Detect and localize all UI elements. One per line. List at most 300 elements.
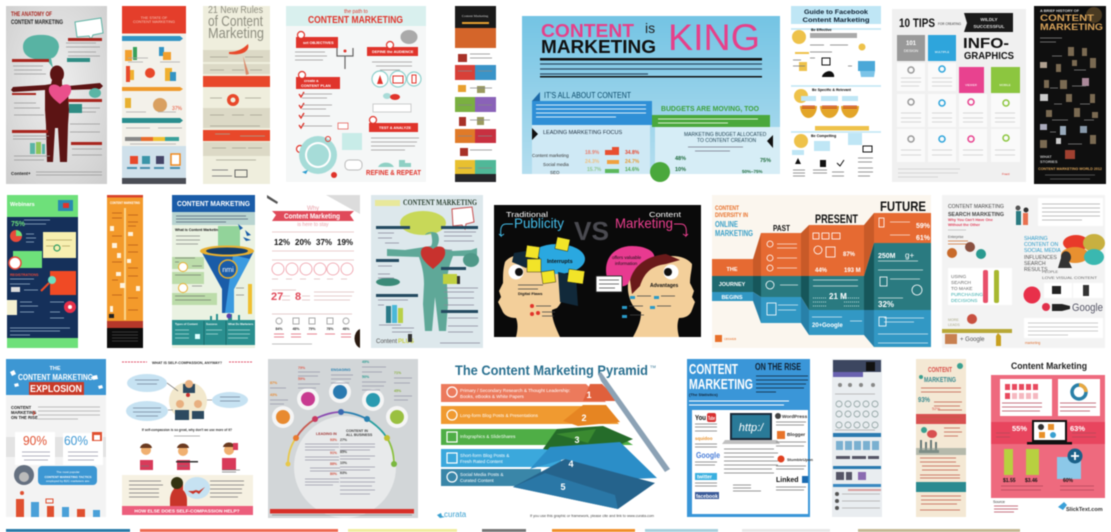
- bar labels: Books, eBooks & White Papers: [460, 394, 525, 399]
- title: [308, 9, 403, 26]
- grey callout: [596, 276, 622, 292]
- search panel: [948, 268, 1012, 305]
- thumbnail: content marketing is king: SEO: [550, 170, 560, 175]
- thumbnail: content diversity in online marketing: CBSWEB: [724, 337, 736, 341]
- question heading: What is Content Marketing?: [175, 228, 223, 232]
- channel ring: [299, 136, 337, 174]
- coffee cup: [354, 329, 360, 348]
- thumbnail: 10 tips for wildly successful infographics: VIEWER: [965, 83, 978, 87]
- top text blocks: 59%: [298, 377, 306, 381]
- bar labels: Long-form Blog Posts & Presentations: [460, 413, 539, 418]
- right logos: StumbleUpon: [787, 457, 814, 462]
- title: WHAT IS SELF-COMPASSION, ANYWAY?: [152, 361, 222, 365]
- thumbnail: content marketing is king: 24.7%: [625, 159, 640, 165]
- stats panel: [122, 146, 186, 178]
- values: 60%: [1063, 478, 1074, 484]
- pinterest to google: [1042, 303, 1050, 311]
- thumbnail: traditional publicity vs content marketing: offers valuable: [612, 255, 642, 260]
- thumbnail: content marketing on the rise: ON THE RISE: [755, 362, 801, 373]
- grey bubble: [400, 30, 418, 44]
- body figure: [11, 66, 103, 162]
- white note panel: [7, 300, 17, 315]
- check lists: [299, 92, 304, 128]
- values: $3.46: [1025, 478, 1038, 484]
- thumbnail: grey arc infographic: 80%: [330, 472, 338, 476]
- top text blocks: 49%: [362, 360, 370, 364]
- layer numbers: 1: [586, 390, 592, 400]
- grey arrow strip: [598, 372, 670, 472]
- thumbnail: content marketing is king: 14.6%: [625, 167, 640, 173]
- thumbnail: content marketing is king: [522, 16, 780, 182]
- logo: Content+: [11, 171, 31, 176]
- numbers: 21 M: [829, 292, 847, 301]
- thumbnail: 10 tips for wildly successful infographics: 101: [906, 41, 917, 47]
- future column: [874, 213, 931, 243]
- top text blocks: 45%: [394, 389, 402, 393]
- large red stats: 8: [295, 291, 301, 303]
- title: [1086, 7, 1102, 23]
- thumbnail: content diversity in online marketing: g+: [905, 251, 914, 260]
- thumbnail: content marketing is king: MARKETING BUDGET ALLOCATED: [684, 132, 767, 138]
- bar labels: [460, 388, 570, 483]
- thumbnail: content marketing and search marketing: USING: [951, 274, 966, 280]
- thumbnail: content marketing funnel: Success: [206, 322, 218, 326]
- thumbnail: grey arc infographic: 10%: [340, 461, 348, 465]
- sharing heading: CONTENT ON: [1024, 242, 1058, 248]
- dark pink band: [991, 422, 1105, 444]
- title: [208, 5, 264, 42]
- timeline small images: [109, 226, 140, 318]
- title: THE STATE OF: [141, 16, 168, 20]
- logo: [715, 335, 722, 342]
- thumbnail: content marketing is king: 18.9%: [585, 150, 600, 156]
- yellow panel: [43, 232, 76, 258]
- thumbnail: content marketing and search marketing: INFLUENCES: [1024, 255, 1057, 261]
- title: [133, 16, 175, 24]
- paper and birds: [218, 226, 240, 250]
- table: [835, 492, 839, 510]
- title: the path to: [344, 9, 368, 15]
- thumbnail: the content marketing explosion: CONTENT MARKETING TACTICS: [44, 475, 92, 479]
- bar labels: Primary / Secondary Research & Thought Leadership:: [460, 388, 570, 393]
- percentages: 12%: [274, 238, 290, 247]
- visual content: LOVE VISUAL CONTENT: [1042, 275, 1098, 280]
- right logos: Blogger: [787, 432, 805, 438]
- thumbnail: content marketing is king: 34.8%: [625, 150, 640, 156]
- thumbnail: content marketing is king: LEADING MARKETING FOCUS: [543, 130, 622, 136]
- title: [948, 204, 1004, 218]
- right logos: Linked: [776, 477, 799, 484]
- logos: squidoo: [695, 436, 713, 441]
- body figure: [387, 232, 477, 331]
- orange semicircles: [800, 106, 859, 118]
- heading right: Content: [649, 210, 682, 219]
- thumbnail: content marketing is king: Social media: [543, 162, 569, 167]
- third section cards: [792, 133, 862, 155]
- thumbnail: the content marketing pyramid: [436, 359, 676, 519]
- left heading: CONTENT: [715, 205, 739, 212]
- thumbnail: content marketing funnel: Types of Content: [175, 322, 198, 326]
- visual content: PEOPLE: [1042, 269, 1058, 274]
- top text blocks: 43%: [270, 393, 278, 397]
- visual content: [1042, 269, 1098, 280]
- blue clouds: [126, 374, 248, 421]
- journey column: [712, 259, 753, 276]
- thumbnail: content marketing is king: 50%–75%: [742, 169, 763, 174]
- center columns: ALL BUSINESS: [346, 433, 373, 437]
- title: CONTENT MARKETING: [18, 373, 93, 382]
- title: [11, 11, 63, 26]
- numbers: 61%: [916, 235, 931, 242]
- thumbnail: content marketing and search marketing: + Google: [960, 337, 985, 343]
- dotted grid: [813, 298, 860, 306]
- title: CONTENT MARKETING: [403, 197, 477, 207]
- connectors: [167, 383, 212, 410]
- layer numbers: 5: [560, 482, 566, 492]
- center columns: CONTENT IN: [346, 429, 368, 433]
- thumbnail: content marketing on the rise: (The Statistics): [689, 392, 718, 397]
- green bands: [172, 257, 217, 305]
- thumbnail: content diversity in online marketing: Google: [822, 323, 843, 329]
- goal post: [337, 48, 353, 69]
- green panel with clock: [13, 251, 42, 268]
- values: $1.55: [1003, 478, 1016, 484]
- speech bubble: [452, 207, 474, 229]
- pink band: [122, 506, 253, 515]
- heart: [421, 247, 445, 269]
- thumbnail: the content marketing pyramid: TM: [650, 364, 656, 369]
- thumbnail: content marketing on the rise: facebook: [696, 494, 718, 500]
- thumbnail: grey arc infographic: 27%: [340, 438, 348, 442]
- thumbnail: why content marketing is here to stay: 78%: [326, 327, 334, 331]
- thumbnail: the state of content marketing: 37%: [172, 106, 183, 112]
- thumbnail: why content marketing is here to stay: is here to stay: [297, 222, 329, 228]
- values: [1003, 478, 1074, 484]
- footer bands: [107, 321, 143, 328]
- top text blocks: 50%: [362, 375, 370, 379]
- tip category blocks: [897, 35, 925, 61]
- thumbnail: the state of content marketing: [122, 6, 186, 184]
- speech and hands: [921, 427, 927, 433]
- paper decorations: [10, 370, 103, 389]
- speech bubble: [75, 18, 103, 39]
- circle photo and pill: [38, 466, 97, 485]
- right logos: [776, 414, 814, 484]
- large red stats: 27: [271, 291, 283, 303]
- thumbnail: content marketing is king: TO CONTENT CREATION: [697, 138, 757, 144]
- thumbnail: the anatomy of content marketing: [6, 6, 107, 184]
- thumbnail: content marketing funnel: [172, 195, 255, 348]
- title: MARKETING: [541, 37, 656, 57]
- thumbnail: why content marketing is here to stay: Content Marketing: [284, 214, 340, 220]
- intro text: [540, 58, 762, 60]
- money bag: [89, 88, 101, 98]
- thumbnail: guide to facebook content marketing: Be Specific & Relevant: [812, 88, 852, 92]
- thumbnail: grey arc infographic: 88%: [330, 462, 338, 466]
- thumbnail: the content marketing explosion: [6, 359, 106, 517]
- thumbnail: content marketing and search marketing: SEARCH: [1024, 261, 1046, 267]
- thumbnail: the content marketing explosion: EXPLOSION: [30, 384, 82, 395]
- logos: Google: [696, 451, 720, 460]
- step number circles: [296, 32, 394, 152]
- teal note: [342, 133, 362, 150]
- thumbnail: why content marketing is here to stay: [266, 195, 360, 348]
- thumbnail: content marketing and search marketing: RESULTS: [1024, 267, 1048, 273]
- title: CONTENT MARKETING: [948, 204, 1004, 210]
- title: [541, 21, 656, 57]
- icons: [766, 218, 922, 326]
- title: [924, 367, 956, 384]
- brain: [400, 211, 446, 235]
- charts: [125, 50, 132, 61]
- red chili graphic: [229, 44, 248, 54]
- thumbnail: why content marketing is here to stay: 48%: [342, 327, 350, 331]
- thumbnail: 10 tips for wildly successful infographics: MOBILE: [999, 83, 1011, 87]
- top text blocks: 87%: [270, 381, 278, 385]
- center columns: [316, 429, 373, 437]
- thumbnail: content marketing and search marketing: TO MAKE: [951, 286, 973, 292]
- band stats: 55%: [1012, 424, 1027, 433]
- right brain: [606, 246, 654, 287]
- section: it's all about content: IT'S ALL ABOUT CONTENT: [544, 91, 631, 100]
- sharing heading: [1024, 236, 1061, 254]
- thumbnail: traditional publicity vs content marketing: information: [615, 261, 638, 266]
- section: budgets are moving: BUDGETS ARE MOVING, TOO: [661, 104, 759, 113]
- audience icons: [372, 71, 421, 87]
- title: [802, 9, 870, 24]
- thumbnail: content marketing on the rise: [687, 359, 814, 517]
- tan bands: [203, 50, 270, 156]
- right head: [628, 256, 695, 337]
- thumbnail: webinars navy: [7, 195, 78, 348]
- thumbnail: 10 tips for wildly successful infographics: SUCCESSFUL: [973, 24, 1005, 29]
- refine and repeat: REFINE & REPEAT: [366, 170, 422, 177]
- tip icons: [908, 66, 1009, 142]
- right eye: [664, 264, 678, 280]
- thumbnail: 10 tips for wildly successful infographics: DESIGN: [904, 49, 919, 53]
- funnel: [201, 251, 254, 313]
- right logos: WordPress: [782, 414, 808, 420]
- thumb icons: [1005, 384, 1038, 399]
- bottom icons and values: [276, 318, 349, 324]
- thumbnail: orange timeline: [107, 195, 143, 348]
- question: If self-compassion is so great, why don't we use more of it?: [142, 428, 232, 432]
- thumbnail: 10 tips for wildly successful infographics: GRAPHICS: [964, 51, 1014, 62]
- thumbnail: content marketing on the rise: http:/: [739, 422, 764, 434]
- dark woman: [170, 479, 187, 506]
- heading text: REGISTRATIONS: [10, 273, 39, 277]
- rainbow arc: [288, 412, 394, 464]
- keyboard and pen: [326, 195, 360, 214]
- people row: [443, 274, 457, 284]
- connectors: [753, 233, 761, 276]
- small drinks icons: [458, 54, 468, 156]
- brain: [23, 35, 59, 68]
- left heading: DIVERSITY IN: [715, 212, 748, 219]
- money bag: [463, 253, 479, 267]
- numbers: 32%: [878, 300, 894, 309]
- red bands: [203, 76, 270, 87]
- logos: [695, 413, 720, 460]
- thumbnail: dark columnar infographic: [455, 6, 496, 182]
- left heading: ONLINE: [715, 220, 738, 229]
- heading left: Traditional: [506, 210, 548, 219]
- numbers: 250M: [878, 253, 896, 260]
- thumbnail: content marketing funnel: What Do Marketers: [228, 322, 254, 326]
- budget panel: [655, 127, 780, 174]
- thumbnail: content marketing and search marketing: SEARCH: [951, 280, 972, 286]
- percentages: 20%: [295, 238, 311, 247]
- tiny historical thumbnails: [1040, 47, 1098, 159]
- grey brain/eye: [376, 278, 400, 286]
- purple header band: [833, 372, 863, 377]
- people circle: [169, 382, 207, 420]
- thumbnail: the path to content marketing: set OBJECTIVES: [303, 41, 334, 45]
- thumbnail: 10 tips for wildly successful infographics: WILDLY: [980, 17, 998, 22]
- numbers: [815, 223, 931, 309]
- column headings: PAST: [773, 223, 791, 233]
- bar labels: Curated Content: [460, 478, 494, 483]
- bars: [441, 384, 606, 402]
- thumbnail: why content marketing is here to stay: 48%: [292, 327, 300, 331]
- thumbnail: grey arc infographic: 93%: [330, 438, 338, 442]
- title: 10 TIPS: [899, 16, 935, 30]
- top text blocks: 79%: [298, 366, 306, 370]
- percentages: 37%: [316, 238, 332, 247]
- thumbnail: grey arc infographic: [268, 359, 418, 518]
- band stats: 63%: [1070, 424, 1085, 433]
- small icons row: [838, 383, 875, 387]
- thumbnail: traditional publicity vs content marketing: Interrupts: [547, 259, 573, 265]
- thumbnail: the path to content marketing: CONTENT PLAN: [301, 84, 331, 88]
- thumbnail: content marketing and search marketing: DECISIONS: [951, 298, 977, 304]
- thumbnail: brief history of content marketing: CONTENT: [1040, 13, 1094, 24]
- thumbnail: brief history of content marketing: WHAT: [1040, 154, 1052, 159]
- title: CONTENT MARKETING: [308, 14, 403, 26]
- layer numbers: 4: [568, 459, 574, 469]
- thumbnail: content diversity in online marketing: [712, 195, 931, 348]
- footer note: If you use this graphic or framework, please cite and link to www.curata.com: [530, 514, 654, 518]
- logos: You: [695, 415, 706, 422]
- thumbnail: brief history of content marketing: CONTENT MARKETING WORLD 2012: [1038, 167, 1102, 171]
- column headings: [773, 198, 926, 233]
- left heading: [715, 205, 753, 238]
- pyramid layers: [583, 384, 619, 401]
- title: The Content Marketing Pyramid: [455, 362, 648, 378]
- thumbnail: brief history of content marketing: A BRIEF HISTORY OF: [1040, 9, 1080, 13]
- tile row: [836, 441, 879, 450]
- curata logo: curata: [444, 510, 467, 519]
- title: Why: [307, 206, 319, 212]
- thumbnail: content diversity in online marketing: 20+: [812, 323, 823, 329]
- left heading: MARKETING: [715, 229, 753, 238]
- thumbnail: the content marketing explosion: 60%: [64, 433, 88, 448]
- layer numbers: 3: [574, 435, 580, 445]
- on the rise heading: MARKETING: [11, 410, 36, 415]
- blue section bands: [833, 433, 881, 437]
- more leads: MORE: [948, 318, 959, 322]
- numbers: 87%: [843, 252, 856, 258]
- thumbnail: content marketing and search marketing: Google: [1072, 302, 1103, 314]
- small bar chart: [30, 143, 35, 154]
- red strip: [270, 509, 414, 514]
- logo: Content: [376, 339, 397, 345]
- thumbnail: dark columnar infographic: Content Marketing: [462, 14, 489, 18]
- title: Content Marketing: [1011, 361, 1087, 371]
- title: CONTENT MARKETING: [177, 201, 251, 208]
- thumbnail: content marketing funnel: nmi: [222, 267, 234, 274]
- white panel: [692, 410, 808, 514]
- thumbnail: the path to content marketing: DEFINE the AUDIENCE: [372, 50, 414, 54]
- title: of Content: [208, 13, 264, 30]
- title: MARKETING: [924, 377, 956, 384]
- teal footer: [172, 320, 255, 345]
- on the rise heading: [11, 405, 38, 420]
- thumbnail: content marketing is king: Content marketing: [532, 153, 569, 158]
- thumbnail: content marketing and search marketing: LEADS: [948, 323, 960, 327]
- footer: [122, 178, 186, 184]
- thumbnail: traditional publicity vs content marketing: Advantages: [650, 283, 679, 289]
- thumbnail: the path to content marketing: TEST & ANALYZE: [379, 126, 411, 130]
- pink body: [991, 375, 1105, 498]
- heart: [49, 84, 71, 104]
- thumbnail: content diversity in online marketing: BEGINS: [721, 295, 743, 301]
- section bars: [12, 38, 102, 145]
- large red stats: [271, 291, 301, 303]
- bar labels: Infographics & SlideShares: [460, 434, 516, 439]
- title: Marketing: [208, 25, 264, 42]
- device images: [866, 362, 875, 371]
- body copy: [13, 43, 102, 175]
- title: CONTENT MARKETING: [110, 201, 140, 205]
- left head: [498, 255, 565, 337]
- 60 percent card: [63, 433, 103, 465]
- top text blocks: [270, 360, 402, 397]
- step labels: [296, 37, 418, 132]
- left eye: [508, 264, 524, 280]
- numbers: 193 M: [844, 268, 861, 274]
- thumbnail: traditional publicity vs content marketing: [494, 205, 701, 337]
- thumbnail: content marketing in australia: [916, 359, 966, 517]
- thumbnail: content diversity in online marketing: THE: [726, 267, 738, 273]
- thumbnail: content diversity in online marketing: JOURNEY: [719, 282, 746, 288]
- thumbnail: content marketing and search marketing: Why You Can't Have One: [948, 218, 993, 222]
- three figures: [140, 458, 236, 470]
- thumbnail: content marketing is king: is: [645, 20, 655, 36]
- source and logo: Source: [993, 500, 1005, 504]
- title: CONTENT: [541, 21, 634, 41]
- thumbnail: content marketing in australia: 52%: [932, 406, 940, 411]
- ring rows: [836, 401, 878, 428]
- thumbnail: brief history of content marketing: STORIES: [1040, 159, 1058, 164]
- thumbnail: traditional publicity vs content marketing: Marketing: [615, 215, 673, 231]
- on the rise heading: CONTENT: [11, 405, 32, 410]
- title: Content Marketing: [802, 17, 870, 24]
- laptop: [1032, 420, 1067, 442]
- people row: [67, 58, 90, 113]
- thumbnail: 10 tips for wildly successful infographics: FOR CREATING: [938, 22, 961, 26]
- thumbnail: content marketing and search marketing: [942, 195, 1105, 348]
- speech bubbles: [1063, 235, 1089, 251]
- ring icons: [272, 263, 353, 275]
- bar labels: Short-form Blog Posts &: [460, 453, 509, 458]
- red band: [916, 414, 966, 424]
- logos: Tube: [708, 416, 715, 422]
- percentages: [274, 238, 353, 247]
- sharing heading: SOCIAL MEDIA: [1024, 248, 1061, 254]
- thumbnail: content marketing and search marketing: Without the Other: [948, 223, 981, 227]
- thumbnail: why content marketing is here to stay: 79%: [308, 327, 316, 331]
